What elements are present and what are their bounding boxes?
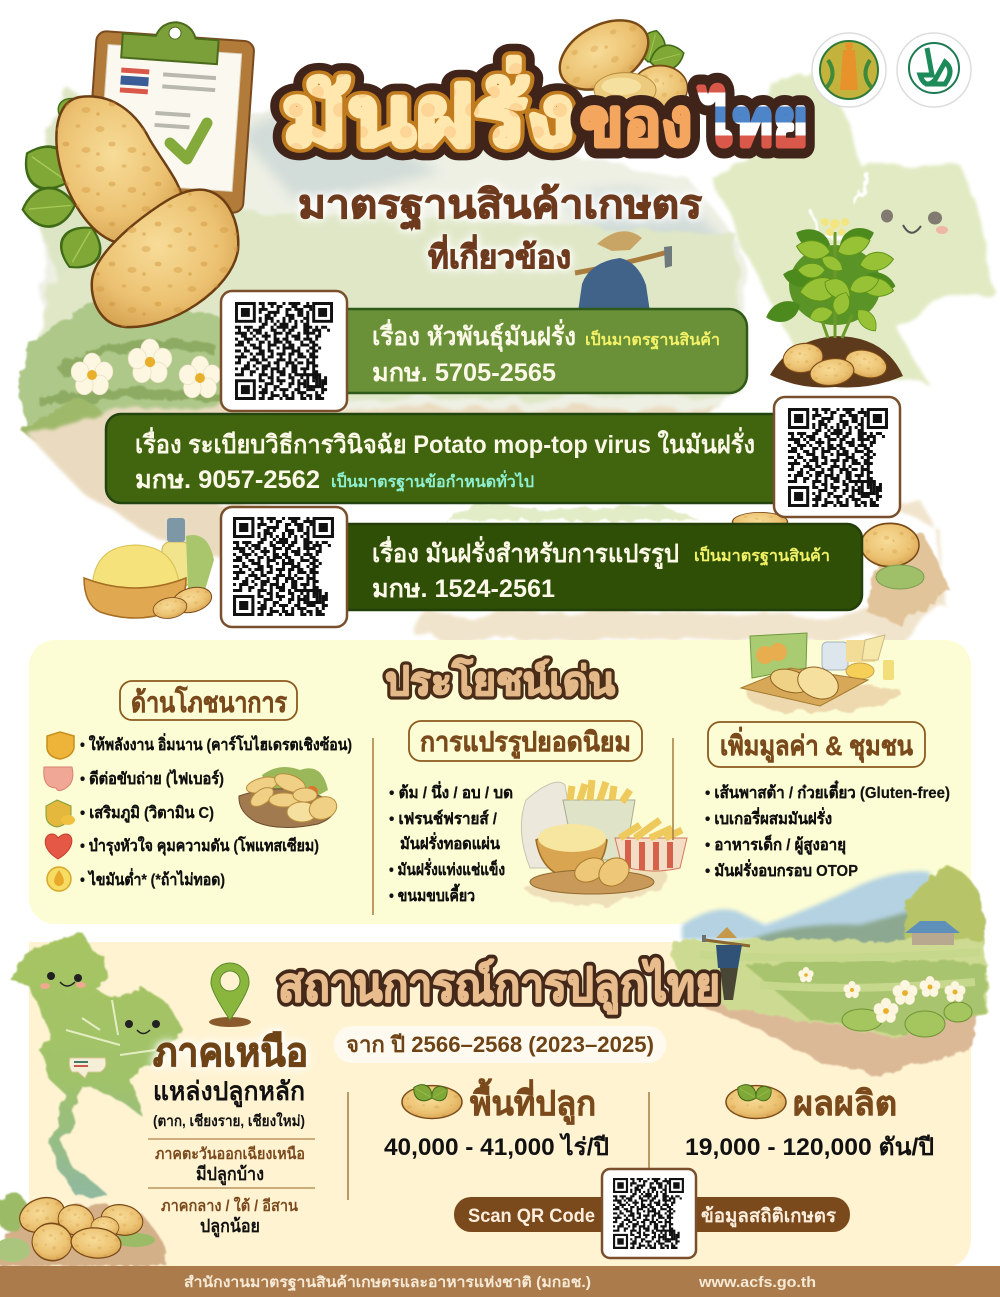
bullet list: processing: • มันฝรั่งแท่งแช่แข็ง xyxy=(389,858,505,879)
illustration: potato bowl xyxy=(239,767,340,828)
region text: แหล่งปลูกหลัก xyxy=(153,1076,305,1108)
bullet list: nutrition: • ให้พลังงาน อิ่มนาน (คาร์โบไฮเดรตเชิงซ้อน) xyxy=(80,733,352,754)
potato plant illustration xyxy=(763,218,903,388)
standard bar 1: เรื่อง หัวพันธุ์มันฝรั่ง xyxy=(372,319,576,353)
heading: situation: สถานการณ์การปลูกไทย xyxy=(278,957,720,1015)
bullet list: processing: มันฝรั่งทอดแผ่น xyxy=(400,832,500,853)
tag: processing: การแปรรูปยอดนิยม xyxy=(420,727,631,759)
scan QR strip xyxy=(454,1169,850,1258)
bullet list: nutrition: • บำรุงหัวใจ คุมความดัน (โพแทสเซียม) xyxy=(80,835,319,856)
map face north xyxy=(40,972,86,989)
illustration: farm landscape xyxy=(672,865,988,1075)
panel: benefits xyxy=(29,633,971,924)
column: nutrition xyxy=(44,681,352,891)
QR card 2 xyxy=(774,397,900,517)
region text: ปลูกน้อย xyxy=(200,1216,260,1238)
title word: Thai: ไทย xyxy=(698,84,808,159)
standard bar 2: มกษ. 9057-2562 xyxy=(135,466,320,494)
divider right xyxy=(648,1092,650,1170)
bullet list: nutrition: • ไขมันต่ำ* (*ถ้าไม่ทอด) xyxy=(80,868,225,889)
title word: potato: มันฝรั่ง xyxy=(282,57,575,163)
bullet list: nutrition: • เสริมภูมิ (วิตามิน C) xyxy=(80,804,214,824)
stat: planted area xyxy=(384,1078,609,1161)
bullet list: nutrition: • ดีต่อขับถ่าย (ไฟเบอร์) xyxy=(80,769,224,788)
clipboard icon xyxy=(85,17,256,213)
bullet list: value added: • มันฝรั่งอบกรอบ OTOP xyxy=(705,859,858,880)
map of Thailand left xyxy=(8,933,183,1197)
potato behind title xyxy=(548,6,688,111)
column: value added xyxy=(705,722,950,880)
stat: yield: ผลผลิต xyxy=(793,1085,897,1123)
bullet list: value added: • อาหารเด็ก / ผู้สูงอายุ xyxy=(705,833,846,856)
column: processing xyxy=(389,721,687,905)
map of Thailand top right xyxy=(710,65,992,380)
title word: potato: มันฝรั่ง xyxy=(282,57,575,163)
illustration: processed potato foods xyxy=(521,780,687,905)
title word: of: ของ xyxy=(580,85,692,159)
bullet list: processing: • ขนมขบเคี้ยว xyxy=(389,883,475,905)
icon: intestines xyxy=(44,767,73,791)
background watercolor field xyxy=(18,80,950,640)
house xyxy=(905,921,960,945)
title word: Thai: ไทย xyxy=(698,84,808,159)
standard bar 2 xyxy=(106,414,796,503)
icon: potato xyxy=(726,1081,786,1118)
bullet list: value added: • เส้นพาสต้า / ก๋วยเตี๋ยว (Gluten-free) xyxy=(705,780,950,802)
standard bar 3: มกษ. 1524-2561 xyxy=(372,575,555,603)
region text: ภาคกลาง / ใต้ / อีสาน xyxy=(161,1196,298,1215)
region text: ภาคเหนือ xyxy=(153,1031,308,1075)
farmer xyxy=(704,927,750,1000)
footer: สำนักงานมาตรฐานสินค้าเกษตรและอาหารแห่งชาติ (มกอช.) xyxy=(184,1274,591,1292)
region text: (ตาก, เชียงราย, เชียงใหม่) xyxy=(153,1112,305,1130)
potato pile xyxy=(0,1192,167,1266)
footer: www.acfs.go.th xyxy=(698,1275,816,1291)
divider 2 xyxy=(672,738,674,840)
logo: department seal xyxy=(812,33,886,107)
bullet list: processing: • ต้ม / นึ่ง / อบ / บด xyxy=(389,781,513,802)
potatoes with leaves xyxy=(15,93,238,327)
scan QR strip: ข้อมูลสถิติเกษตร xyxy=(701,1205,837,1228)
standard bar 3: เป็นมาตรฐานสินค้า xyxy=(694,544,830,566)
mashed potato bowl illustration xyxy=(84,518,214,621)
tag: value added xyxy=(708,722,925,767)
subtitle: มาตรฐานสินค้าเกษตร xyxy=(298,183,703,231)
subtitle xyxy=(298,183,703,275)
heading: situation: สถานการณ์การปลูกไทย xyxy=(278,957,720,1015)
divider 1 xyxy=(372,738,374,915)
heading: benefits: ประโยชน์เด่น xyxy=(385,658,615,704)
bullet list: value added xyxy=(705,780,950,880)
standard bar 1 xyxy=(330,309,747,393)
bullet list: processing xyxy=(389,781,513,905)
icon: shield immunity xyxy=(46,800,75,827)
scan QR strip: Scan QR Code xyxy=(468,1206,595,1227)
icon: oil drop xyxy=(47,867,71,891)
QR card 4 xyxy=(602,1169,696,1258)
QR card 1 xyxy=(221,291,347,411)
standard bar 1: มกษ. 5705-2565 xyxy=(372,359,556,387)
bullet list: nutrition xyxy=(80,733,352,889)
year pill: จาก ปี 2566–2568 (2023–2025) xyxy=(346,1032,654,1057)
title word: of: ของ xyxy=(580,85,692,159)
tag: nutrition xyxy=(120,681,297,720)
icon: shield energy xyxy=(47,732,74,759)
footer xyxy=(0,1266,1000,1297)
title word: potato: มันฝรั่ง xyxy=(282,57,575,163)
standard bar 3 xyxy=(330,524,862,610)
year pill xyxy=(334,1026,666,1063)
heading: benefits: ประโยชน์เด่น xyxy=(385,658,615,704)
stat: yield: 19,000 - 120,000 ตัน/ปี xyxy=(685,1134,934,1161)
standard bar 2: เรื่อง ระเบียบวิธีการวินิจฉัย Potato mop-top virus ในมันฝรั่ง xyxy=(135,427,755,459)
flowers xyxy=(71,339,221,398)
standard bar 2: เป็นมาตรฐานข้อกำหนดทั่วไป xyxy=(331,470,534,492)
map face northeast xyxy=(125,1020,160,1034)
bullet list: value added: • เบเกอรี่ผสมมันฝรั่ง xyxy=(705,807,832,828)
divider left xyxy=(347,1092,349,1200)
farmer illustration xyxy=(575,231,672,312)
title xyxy=(282,57,808,163)
illustration: processed products xyxy=(741,633,900,712)
icon: heart xyxy=(45,834,72,859)
tag: value added: เพิ่มมูลค่า & ชุมชน xyxy=(720,726,913,763)
map badge xyxy=(69,1058,106,1078)
region text: มีปลูกบ้าง xyxy=(196,1164,264,1186)
stat: planted area: 40,000 - 41,000 ไร่/ปี xyxy=(384,1132,609,1161)
logo: ACFS seal xyxy=(897,33,971,107)
map face xyxy=(881,210,948,234)
QR card 3 xyxy=(221,507,347,627)
standard bar 1: เป็นมาตรฐานสินค้า xyxy=(585,328,720,350)
logos xyxy=(812,33,971,107)
tag: nutrition: ด้านโภชนาการ xyxy=(131,685,287,718)
stat: planted area: พื้นที่ปลูก xyxy=(470,1078,596,1125)
subtitle: ที่เกี่ยวข้อง xyxy=(428,234,571,275)
stat: yield xyxy=(685,1081,934,1161)
region text: ภาคตะวันออกเฉียงเหนือ xyxy=(155,1145,305,1163)
bullet list: processing: • เฟรนช์ฟรายส์ / xyxy=(389,809,498,828)
region text xyxy=(148,1031,315,1238)
panel: planting situation xyxy=(0,865,988,1267)
icon: location pin xyxy=(209,963,251,1027)
soil potatoes right xyxy=(732,512,924,589)
icon: potato xyxy=(402,1081,462,1118)
standard bar 3: เรื่อง มันฝรั่งสำหรับการแปรรูป xyxy=(372,536,679,570)
